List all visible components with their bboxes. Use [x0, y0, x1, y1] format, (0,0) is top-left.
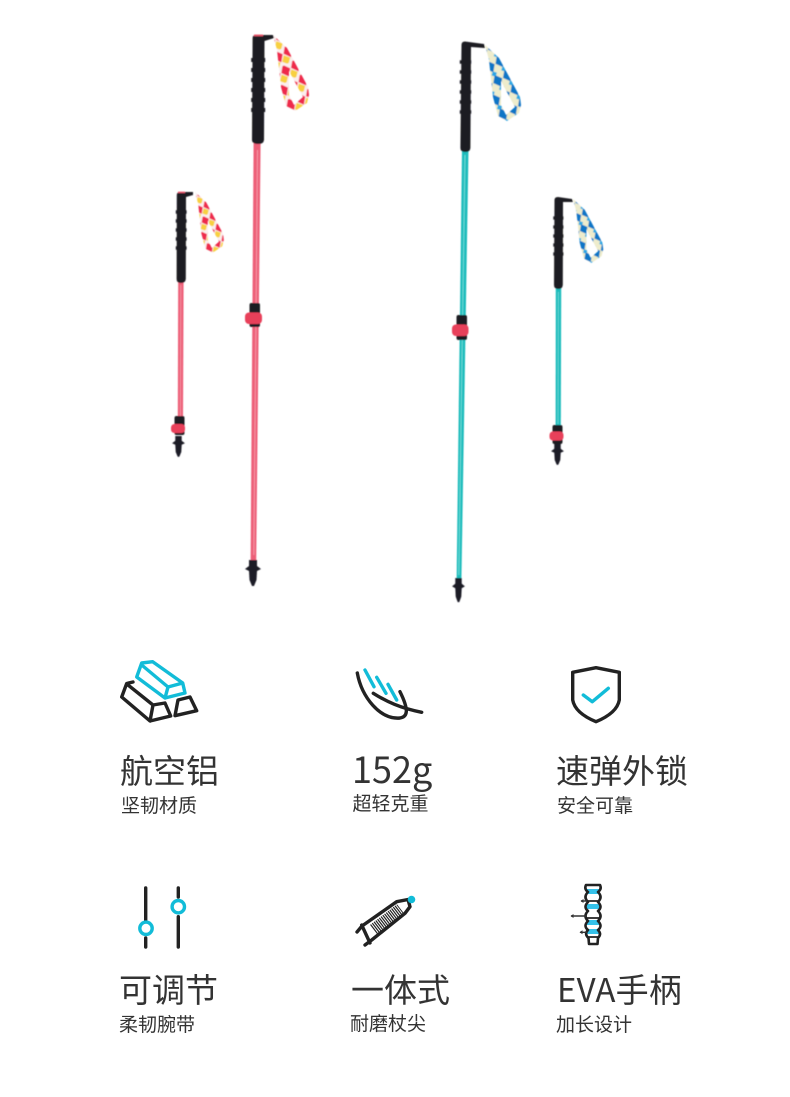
heading: 可调节: [119, 964, 218, 1012]
feature: EVA grip: [556, 885, 682, 1037]
heading: 一体式: [351, 964, 450, 1012]
icon: metal ingots: [122, 662, 197, 721]
black grip: [252, 35, 274, 144]
black grip: [177, 192, 193, 283]
feature: quick lock: [556, 668, 688, 818]
pink wrist strap: [195, 192, 224, 253]
heading: 速弹外锁: [556, 745, 688, 793]
adjustment clamp: [174, 416, 184, 435]
pole: long pink: [245, 34, 309, 586]
teal shaft: [457, 150, 468, 580]
pole: short teal: [550, 197, 603, 465]
subheading: 坚韧材质: [121, 791, 197, 818]
adjustment clamp: [552, 425, 562, 444]
blue wrist strap: [573, 199, 603, 263]
pole: short pink: [171, 192, 224, 457]
icon: shield with check: [573, 668, 619, 722]
adjustment clamp: [456, 315, 467, 340]
icon: feather: [357, 670, 422, 718]
subheading: 安全可靠: [557, 791, 633, 818]
teal shaft: [556, 287, 561, 428]
feature: weight: [352, 670, 432, 816]
tip: [172, 436, 185, 457]
tip: [452, 578, 465, 602]
black grip: [460, 42, 485, 152]
heading: 152g: [352, 742, 432, 794]
icon: pole grip diagonal: [357, 896, 415, 945]
subheading: 柔韧腕带: [119, 1010, 195, 1037]
subheading: 超轻克重: [352, 789, 429, 816]
subheading: 加长设计: [556, 1010, 632, 1037]
subheading: 耐磨杖尖: [350, 1009, 426, 1036]
heading: EVA手柄: [557, 964, 682, 1012]
blue wrist strap: [485, 45, 521, 121]
feature: aviation aluminium: [120, 662, 219, 818]
tip: [551, 444, 564, 465]
pink shaft: [251, 142, 261, 562]
adjustment clamp: [250, 303, 260, 327]
heading: 航空铝: [120, 745, 219, 793]
pink shaft: [178, 281, 184, 420]
tip: [245, 560, 261, 586]
pole: long teal: [452, 42, 521, 602]
icon: sliders: [140, 888, 184, 947]
feature: one piece: [350, 896, 450, 1036]
feature: adjustable: [119, 888, 218, 1037]
pink wrist strap: [273, 35, 309, 111]
black grip: [554, 197, 573, 289]
icon: EVA handle: [570, 885, 601, 944]
